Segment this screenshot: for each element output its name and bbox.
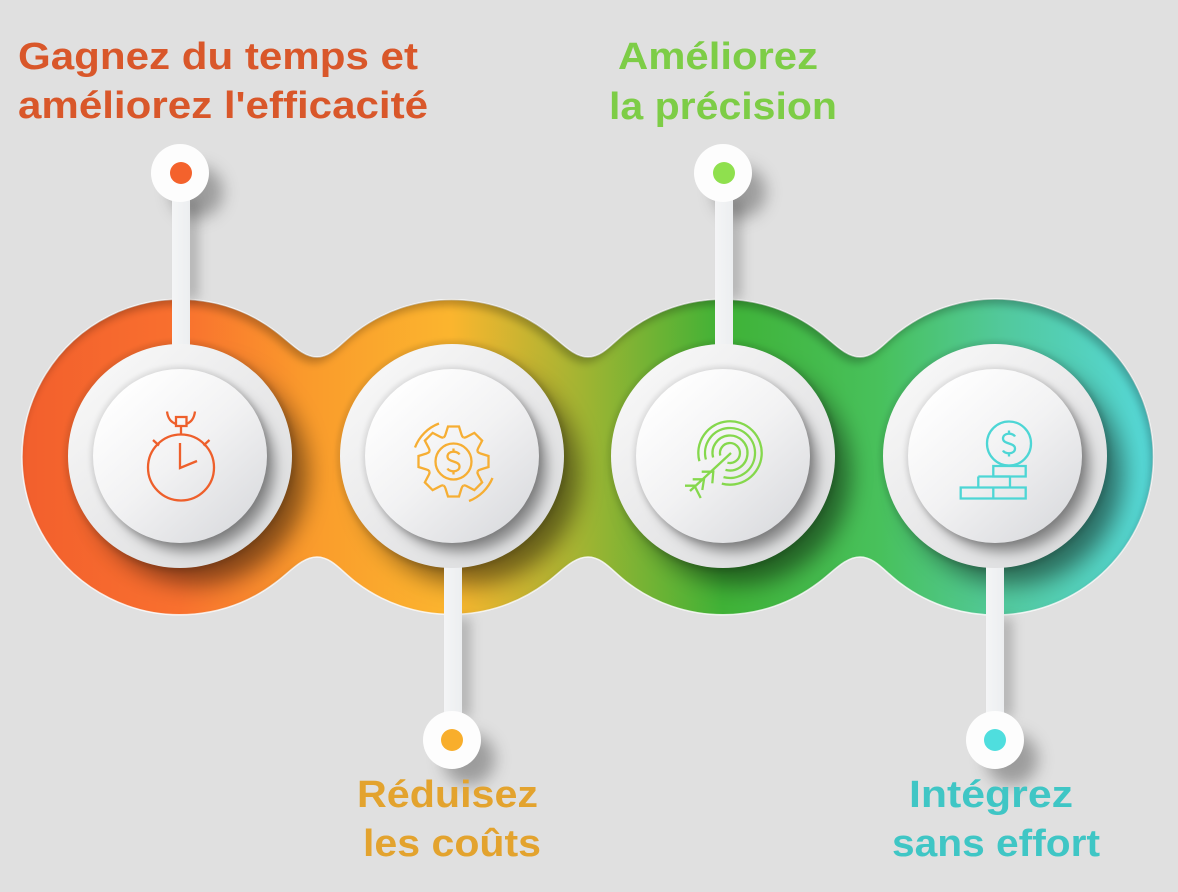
disk 2	[340, 344, 564, 568]
gradient band	[21, 298, 1154, 616]
heading: Gagnez du temps et améliorez l'efficacité: améliorez l'efficacité	[18, 85, 428, 127]
heading: Gagnez du temps et améliorez l'efficacité: Gagnez du temps et	[18, 36, 418, 78]
heading: Améliorez la précision	[609, 36, 837, 128]
heading: Intégrez sans effort	[892, 774, 1100, 865]
pin 1 connector	[151, 144, 223, 347]
icon: coin and bricks	[961, 422, 1031, 498]
disk 1	[68, 344, 292, 568]
disk 3	[611, 344, 835, 568]
heading: Améliorez la précision: Améliorez	[618, 36, 818, 78]
heading: Réduisez les coûts: les coûts	[363, 823, 541, 865]
pin 3 connector	[694, 144, 766, 347]
pin 2 connector	[423, 562, 495, 785]
heading: Gagnez du temps et améliorez l'efficacité	[18, 36, 428, 127]
icon: stopwatch	[148, 412, 214, 500]
heading: Réduisez les coûts: Réduisez	[357, 774, 538, 816]
icon: gear with dollar	[415, 424, 492, 501]
disk 4	[883, 344, 1107, 568]
icon: target with arrow	[685, 421, 762, 498]
heading: Intégrez sans effort: Intégrez	[909, 774, 1073, 816]
pin 4 connector	[966, 562, 1038, 785]
heading: Améliorez la précision: la précision	[609, 86, 837, 128]
heading: Réduisez les coûts	[357, 774, 541, 865]
heading: Intégrez sans effort: sans effort	[892, 823, 1100, 865]
